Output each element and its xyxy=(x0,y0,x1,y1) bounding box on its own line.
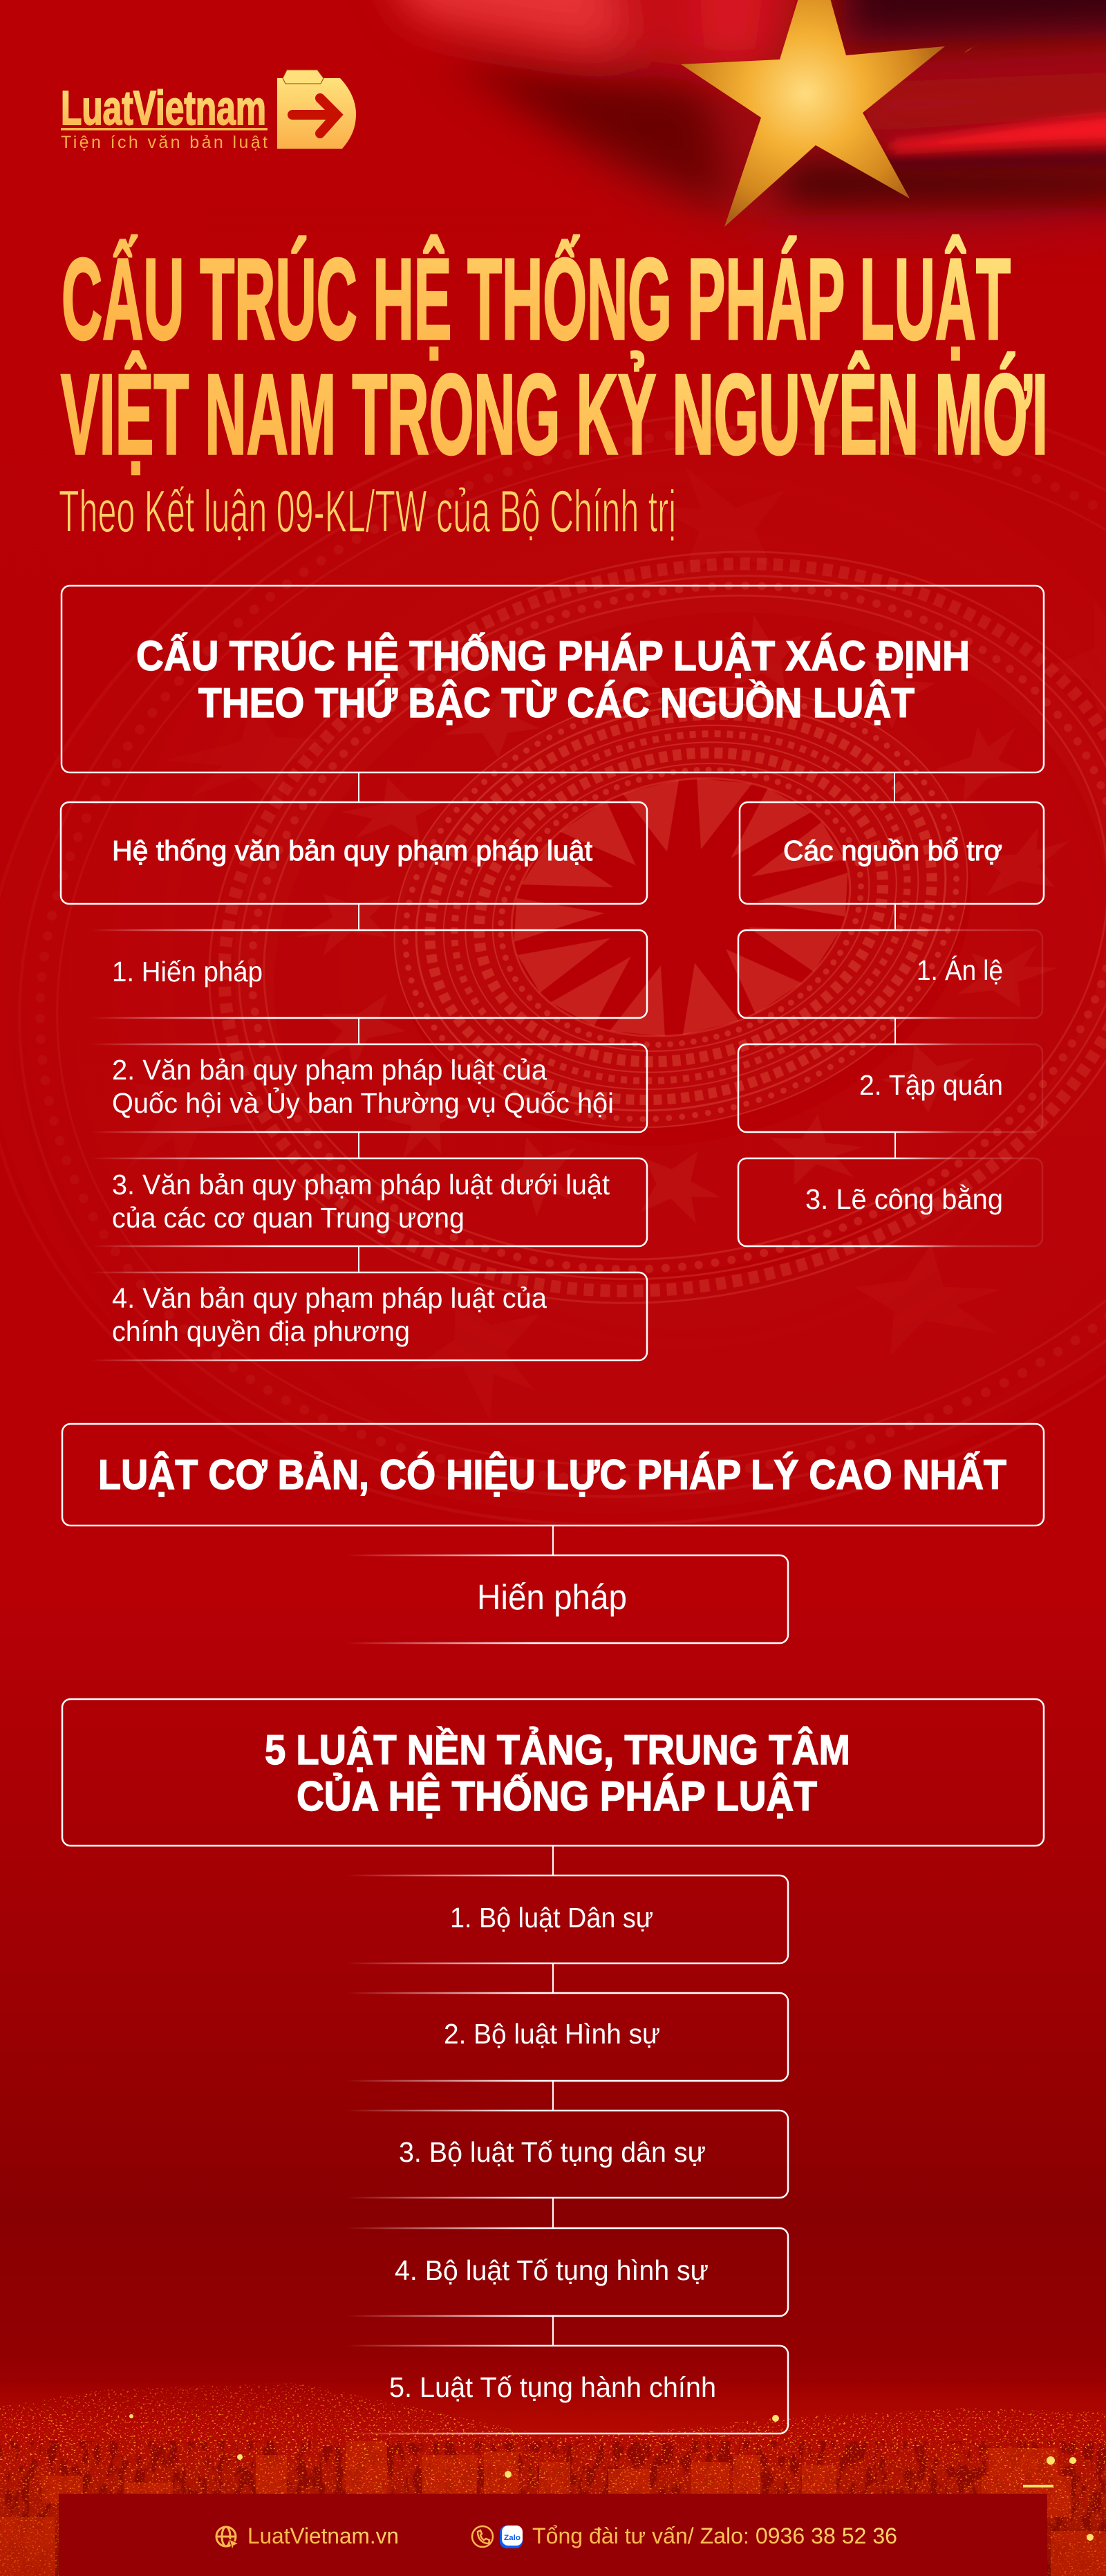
logo: LuatVietnam xyxy=(61,70,356,152)
list item: central agencies documents xyxy=(61,1158,647,1246)
list item: Án lệ xyxy=(738,930,1042,1018)
panel: basic law heading xyxy=(62,1424,1044,1526)
panel: legal normative documents system xyxy=(61,802,647,904)
hotline: Tổng đài tư vấn/ Zalo: 0936 38 52 36 xyxy=(532,2523,897,2548)
emblem figures band xyxy=(299,615,1069,1223)
panel: five foundational laws heading: 5 LUẬT NỀN TẢNG, TRUNG TÂM xyxy=(265,1727,850,1773)
panel: supplementary sources: Các nguồn bổ trợ xyxy=(783,835,1002,867)
list item: Bộ luật Dân sự: 1. Bộ luật Dân sự xyxy=(450,1902,653,1934)
list item: Bộ luật Hình sự xyxy=(332,1993,788,2081)
list item: Án lệ: 1. Án lệ xyxy=(917,954,1003,986)
list item: Lẽ công bằng xyxy=(738,1158,1042,1246)
list item: Hiến pháp xyxy=(61,930,647,1018)
panel: hierarchy heading: CẤU TRÚC HỆ THỐNG PHÁP LUẬT XÁC ĐỊNH xyxy=(136,633,970,679)
panel: hierarchy heading xyxy=(62,586,1044,772)
connectors: five laws xyxy=(552,1846,554,2346)
list item: National Assembly documents xyxy=(61,1044,647,1132)
flag star xyxy=(681,0,984,227)
icon: phone xyxy=(472,2526,493,2547)
list item: Luật Tố tụng hành chính xyxy=(332,2346,788,2434)
logo tagline: Tiện ích văn bản luật xyxy=(61,133,268,152)
list item: Bộ luật Dân sự xyxy=(332,1875,788,1963)
panel: five foundational laws heading xyxy=(62,1699,1044,1846)
list item: Tập quán: 2. Tập quán xyxy=(859,1069,1003,1101)
background emblem: bronze drum xyxy=(18,415,1106,1524)
list item: Bộ luật Tố tụng hình sự xyxy=(332,2228,788,2316)
panel: basic law heading: LUẬT CƠ BẢN, CÓ HIỆU LỰC PHÁP LÝ CAO NHẤT xyxy=(98,1452,1006,1498)
list item: Tập quán xyxy=(738,1044,1042,1132)
logo wordmark: LuatVietnam xyxy=(61,81,266,135)
list item: Bộ luật Hình sự: 2. Bộ luật Hình sự xyxy=(444,2018,660,2050)
list item: Bộ luật Tố tụng hình sự: 4. Bộ luật Tố tụng hình sự xyxy=(395,2254,709,2286)
title xyxy=(61,235,1048,478)
city skyline xyxy=(0,2379,1106,2576)
icon: zalo xyxy=(500,2526,523,2548)
list item: central agencies documents: của các cơ quan Trung ương xyxy=(112,1202,465,1234)
list item: Bộ luật Tố tụng dân sự xyxy=(332,2111,788,2198)
connector: basic law xyxy=(552,1526,554,1555)
box: Hiến pháp: Hiến pháp xyxy=(477,1577,627,1617)
list item: local government documents: chính quyền địa phương xyxy=(112,1315,410,1347)
list item: local government documents xyxy=(61,1272,647,1360)
list item: local government documents: 4. Văn bản quy phạm pháp luật của xyxy=(112,1282,547,1314)
list item: Lẽ công bằng: 3. Lẽ công bằng xyxy=(805,1183,1003,1215)
box: Hiến pháp xyxy=(332,1555,788,1643)
footer bar xyxy=(59,2494,1047,2576)
list item: central agencies documents: 3. Văn bản quy phạm pháp luật dưới luật xyxy=(112,1169,610,1201)
connectors: hierarchy xyxy=(359,772,895,1272)
website: LuatVietnam.vn xyxy=(247,2523,399,2548)
list item: National Assembly documents: Quốc hội và Ủy ban Thường vụ Quốc hội xyxy=(112,1087,614,1119)
panel: five foundational laws heading: CỦA HỆ THỐNG PHÁP LUẬT xyxy=(297,1773,817,1819)
icon: zalo: Zalo xyxy=(504,2534,521,2542)
panel: hierarchy heading: THEO THỨ BẬC TỪ CÁC NGUỒN LUẬT xyxy=(198,680,915,726)
emblem star triangles xyxy=(514,779,847,1036)
icon: globe xyxy=(216,2527,238,2550)
logo folder icon xyxy=(277,70,356,149)
panel: supplementary sources xyxy=(740,802,1044,904)
panel: legal normative documents system: Hệ thống văn bản quy phạm pháp luật xyxy=(112,835,593,867)
list item: Bộ luật Tố tụng dân sự: 3. Bộ luật Tố tụng dân sự xyxy=(399,2136,706,2168)
list item: Hiến pháp: 1. Hiến pháp xyxy=(112,956,263,988)
list item: Luật Tố tụng hành chính: 5. Luật Tố tụng hành chính xyxy=(389,2371,716,2403)
waving silk flag xyxy=(207,0,1106,297)
list item: National Assembly documents: 2. Văn bản quy phạm pháp luật của xyxy=(112,1054,547,1086)
